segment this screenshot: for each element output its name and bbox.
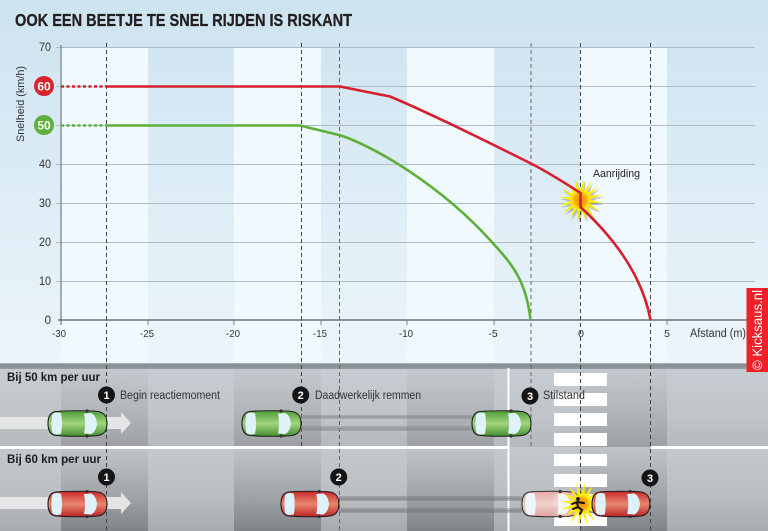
collision burst on chart [556,175,607,227]
car: green 1 [48,409,107,438]
speed badge 60: 60 [37,80,51,94]
step badge: 60 km/h 2: 2 [336,472,342,484]
x axis labels: 0 [578,328,584,340]
x axis labels: -25 [140,328,154,340]
step badge: 60 km/h 2 [330,468,347,486]
skid marks 50 [301,415,472,431]
car: green 2 [242,409,301,438]
x axis labels: -30 [52,328,66,340]
lane heading 60: Bij 60 km per uur [7,452,101,466]
car: red 1 [48,490,107,518]
y axis labels [39,42,51,327]
curve: 50 km/h [61,126,530,320]
x axis labels [52,328,670,340]
step badge: 60 km/h 3: 3 [647,473,653,485]
title: OOK EEN BEETJE TE SNEL RIJDEN IS RISKANT [15,10,352,30]
x axis labels: -15 [313,328,327,340]
grid lines [56,48,755,282]
curve: 60 km/h [61,86,650,320]
road panel [0,363,768,531]
speed badge 50 [34,115,54,135]
y axis labels: 10 [39,276,51,288]
y axis title: Snelheid (km/h) [15,66,27,142]
step badge: 50 km/h 1: 1 [103,390,110,402]
car: red 3 [592,490,650,518]
car: green 3 [472,409,531,438]
step badge: 60 km/h 3 [642,470,658,486]
y axis labels: 70 [39,42,51,54]
copyright tag [746,288,768,372]
y axis labels: 40 [39,159,51,171]
step label: standstill: Stilstand [543,390,585,402]
step badge: 60 km/h 1 [98,468,115,486]
x axis labels: -10 [399,328,413,340]
speed badge 50: 50 [37,118,51,132]
label: collision: Aanrijding [593,168,640,180]
step badge: 50 km/h 3: 3 [527,391,533,403]
x axis labels: -5 [488,328,498,340]
skid marks 60 [339,496,522,513]
step badge: 50 km/h 2: 2 [298,390,304,402]
lane heading 50: Bij 50 km per uur [7,370,100,384]
dashed markers [106,43,650,531]
car: ghost red at impact [522,490,580,518]
x axis title: Afstand (m) [690,328,746,340]
step label: begin: Begin reactiemoment [120,390,221,402]
axes [58,45,747,325]
arrow lane 2 [0,492,131,514]
y axis labels: 30 [39,198,51,210]
collision burst on road [557,479,607,529]
y axis labels: 0 [45,315,51,327]
arrow lane 1 [0,412,131,434]
step badge: 60 km/h 1: 1 [103,472,110,484]
copyright tag: © Kicksaus.nl [750,290,765,370]
step badge: 50 km/h 2 [292,386,309,404]
icon: pedestrian [572,497,584,514]
x axis labels: -20 [226,328,240,340]
step badge: 50 km/h 1 [98,386,115,404]
y axis labels: 20 [39,237,51,249]
x axis labels: 5 [664,328,670,340]
step badge: 50 km/h 3 [522,388,538,404]
chart background [0,0,768,363]
speed badge 60 [34,76,54,96]
crosswalk [554,373,607,526]
step label: braking: Daadwerkelijk remmen [315,390,421,402]
car: red 2 [281,490,339,518]
